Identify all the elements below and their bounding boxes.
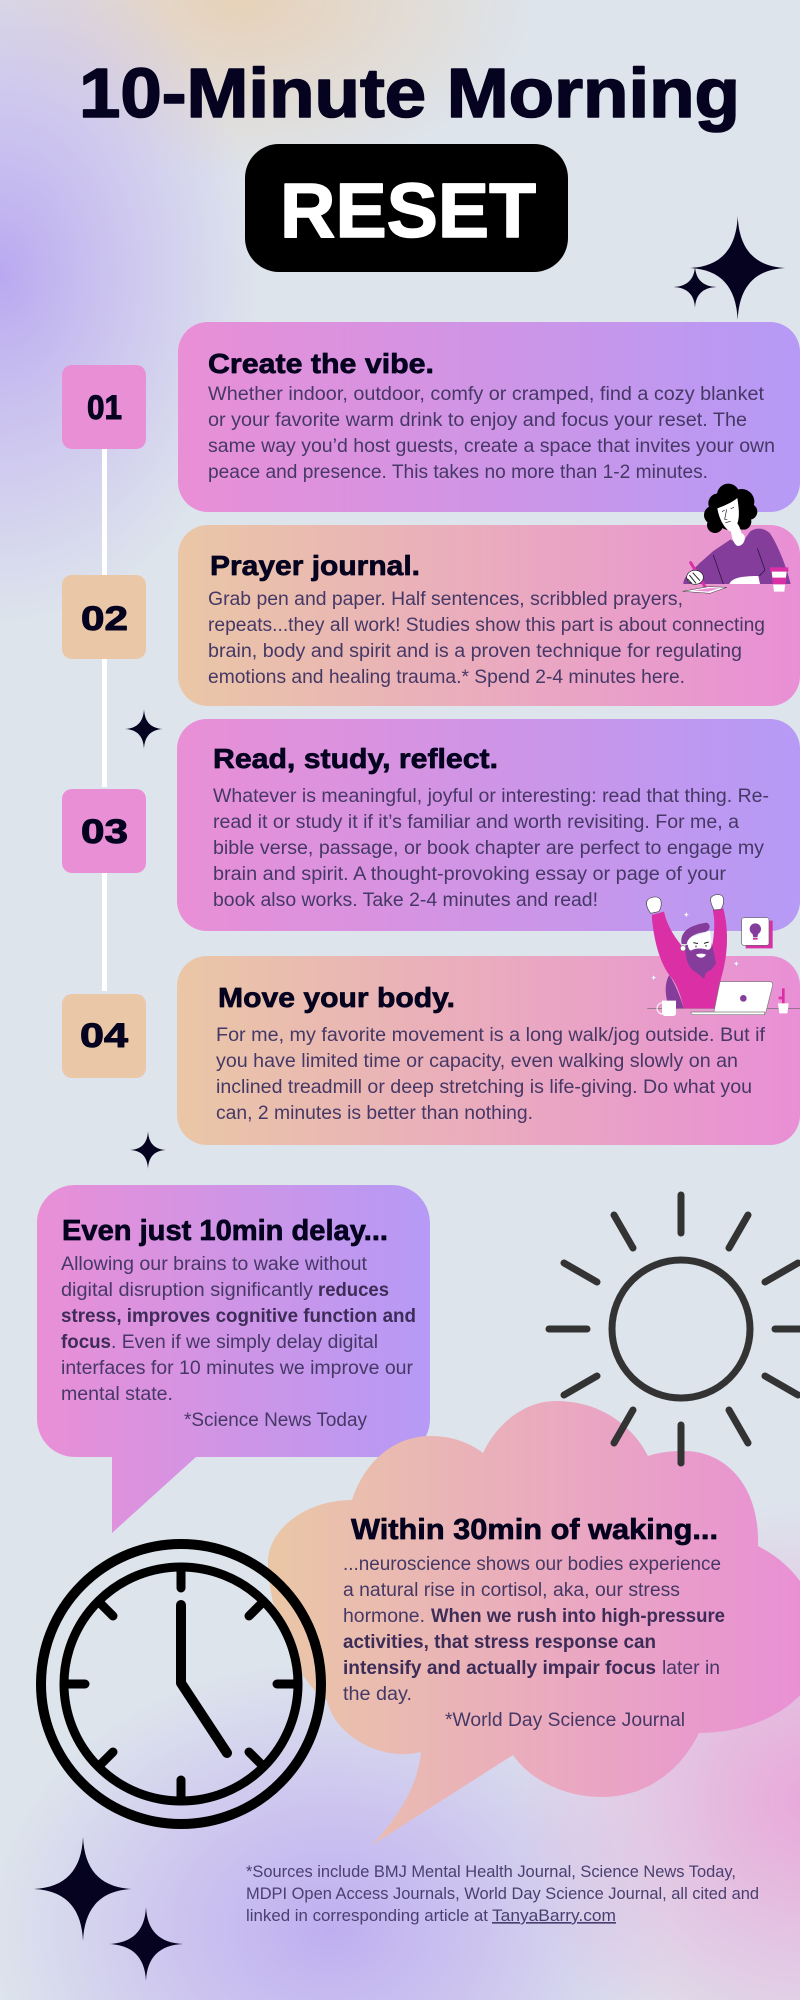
heading: step 3: Read, study, reflect. — [213, 743, 498, 774]
text: step 2 body — [208, 589, 765, 688]
text: 10min delay body: . Even if we simply delay digital — [111, 1332, 378, 1353]
badge 03: 03 — [81, 813, 128, 851]
badge 02 — [62, 575, 146, 659]
text: 30min body: activities, that stress response can — [343, 1632, 656, 1653]
speech bubble shape — [37, 1185, 430, 1533]
text: step 2 body: emotions and healing trauma.* Spend 2-4 minutes here. — [208, 667, 685, 688]
text: 30min body: the day. — [343, 1684, 412, 1705]
panel: step 2 prayer journal — [178, 525, 800, 706]
heading: step 2: Prayer journal. — [210, 550, 420, 581]
text: step 1 body: peace and presence. This takes no more than 1-2 minutes. — [208, 462, 708, 483]
text: 30min body: hormone. — [343, 1606, 425, 1627]
cloud speech bubble shape — [268, 1401, 800, 1845]
text: 10min delay body: focus — [61, 1332, 111, 1353]
icon: sparkle stars top right — [674, 216, 785, 320]
text: step 3 body: bible verse, passage, or book chapter are perfect to engage my — [213, 838, 765, 859]
badge 01 — [62, 365, 146, 449]
text: step 2 body: repeats...they all work! Studies show this part is about connecting — [208, 615, 765, 636]
text: step 3 body: read it or study it if it’s familiar and worth revisiting. For me, a — [213, 812, 739, 833]
callout: even just 10min delay — [37, 1185, 430, 1533]
text: step 4 body — [216, 1025, 766, 1124]
text: step 3 body: book also works. Take 2-4 minutes and read! — [213, 890, 598, 911]
title: 10-Minute Morning — [79, 54, 740, 132]
title badge: RESET — [245, 144, 568, 272]
text: sources footnote — [246, 1863, 759, 1925]
text: sources footnote: TanyaBarry.com — [492, 1907, 616, 1925]
heading: step 4: Move your body. — [218, 982, 455, 1013]
text: step 1 body — [208, 384, 775, 483]
panel: step 1 create the vibe — [178, 322, 800, 512]
heading: 10min delay: Even just 10min delay... — [62, 1215, 388, 1247]
panel: step 4 move your body — [177, 956, 800, 1145]
badge 04 — [62, 994, 146, 1078]
badge 02: 02 — [81, 600, 128, 638]
icon: clock — [41, 1544, 321, 1824]
text: 10min delay body — [61, 1254, 416, 1431]
text: 30min body — [343, 1554, 725, 1731]
text: 10min delay body: reduces — [318, 1280, 389, 1301]
text: step 1 body: Whether indoor, outdoor, comfy or cramped, find a cozy blanket — [208, 384, 765, 405]
star divider left — [125, 709, 163, 749]
text: 30min body: intensify and actually impair focus — [343, 1658, 656, 1679]
heading: 30min: Within 30min of waking... — [351, 1514, 718, 1546]
text: sources footnote: linked in corresponding article at — [246, 1907, 488, 1925]
text: step 3 body: Whatever is meaningful, joyful or interesting: read that thing. Re- — [213, 786, 769, 807]
text: 10min delay body: *Science News Today — [184, 1410, 367, 1431]
text: 30min body: a natural rise in cortisol, aka, our stress — [343, 1580, 680, 1601]
icon: sun — [549, 1195, 800, 1463]
text: 10min delay body: stress, improves cognitive function and — [61, 1306, 416, 1327]
text: 10min delay body: digital disruption significantly — [61, 1280, 314, 1301]
title badge: RESET: RESET — [280, 168, 536, 254]
text: sources footnote: MDPI Open Access Journals, World Day Science Journal, all cited and — [246, 1885, 759, 1903]
callout: within 30min of waking — [268, 1401, 800, 1845]
text: 10min delay body: Allowing our brains to wake without — [61, 1254, 368, 1275]
text: step 3 body: brain and spirit. A thought-provoking essay or page of your — [213, 864, 727, 885]
timeline line — [102, 449, 107, 991]
text: step 1 body: or your favorite warm drink to enjoy and focus your reset. The — [208, 410, 747, 431]
badge 03 — [62, 789, 146, 873]
text: step 1 body: same way you’d host guests, create a space that invites your own — [208, 436, 775, 457]
icon: sparkle stars bottom left — [34, 1837, 183, 1981]
text: step 3 body — [213, 786, 769, 911]
icon: man cheering at laptop — [647, 895, 800, 1016]
badge 01: 01 — [87, 389, 122, 427]
text: step 2 body: Grab pen and paper. Half sentences, scribbled prayers, — [208, 589, 683, 610]
heading: step 1: Create the vibe. — [208, 348, 434, 379]
panel: step 3 read study reflect — [177, 719, 800, 931]
icon: woman writing in journal — [683, 484, 791, 593]
text: 10min delay body: mental state. — [61, 1384, 173, 1405]
badge 04: 04 — [80, 1017, 128, 1055]
text: step 4 body: can, 2 minutes is better than nothing. — [216, 1103, 533, 1124]
text: step 4 body: you have limited time or capacity, even walking slowly on an — [216, 1051, 738, 1072]
star divider lower — [130, 1131, 166, 1169]
text: 30min body: later in — [662, 1658, 720, 1679]
text: step 2 body: brain, body and spirit and is a proven technique for regulating — [208, 641, 742, 662]
text: sources footnote: *Sources include BMJ Mental Health Journal, Science News Today, — [246, 1863, 736, 1881]
text: step 4 body: inclined treadmill or deep stretching is life-giving. Do what you — [216, 1077, 752, 1098]
text: step 4 body: For me, my favorite movement is a long walk/jog outside. But if — [216, 1025, 766, 1046]
text: 30min body: When we rush into high-pressure — [431, 1606, 725, 1627]
text: 30min body: *World Day Science Journal — [445, 1710, 685, 1731]
text: 10min delay body: interfaces for 10 minutes we improve our — [61, 1358, 414, 1379]
text: 30min body: ...neuroscience shows our bodies experience — [343, 1554, 721, 1575]
